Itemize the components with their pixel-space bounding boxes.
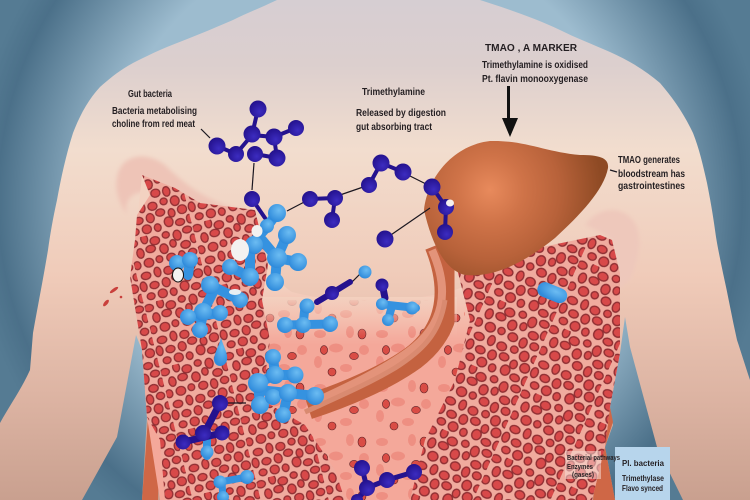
side strip: left flank (142, 418, 160, 500)
arrow to liver (502, 86, 518, 137)
hepatic duct (305, 245, 447, 412)
caption panel: bottom right: Pl. bacteria (622, 459, 665, 468)
label: trimethylamine: Trimethylamine (362, 87, 425, 98)
label: TMAO: TMAO , A MARKER (485, 43, 578, 54)
tissue: fade above sparse cells (262, 297, 457, 337)
label: liver: gastrointestines (618, 181, 685, 192)
molecule: dark blue chain to liver (244, 154, 454, 248)
caption: lower tissue: Enzymes (567, 462, 593, 471)
caption panel: bottom right: Trimethylase (622, 474, 664, 483)
label: liver: TMAO generates (618, 155, 680, 166)
caption panel: bottom right: Flavo synced (622, 484, 663, 493)
molecule: lower light blue cluster (248, 349, 324, 423)
caption panel: bottom right (615, 447, 670, 500)
label: gut bacteria: Bacteria metabolising (112, 106, 197, 117)
label: TMAO (482, 43, 588, 85)
label: gut bacteria (112, 89, 197, 130)
tissue: left dense red cells (130, 175, 344, 500)
molecule: blue and dark centre (277, 266, 372, 333)
right fold halo (585, 210, 639, 290)
label: trimethylamine: gut absorbing tract (356, 122, 433, 133)
caption: lower tissue (565, 451, 620, 479)
caption: lower tissue: Bacterial pathways (567, 453, 620, 462)
liver (424, 141, 608, 275)
molecule: blue right of centre (376, 278, 418, 326)
molecule: dark bottom (351, 460, 422, 500)
capsule: blue on right tissue (535, 280, 569, 305)
tissue: right dense red cells (410, 235, 620, 500)
side strip: right flank (593, 407, 615, 500)
label: liver (618, 155, 685, 192)
molecule: dark and blue lower left (176, 395, 230, 458)
label: gut bacteria: Gut bacteria (128, 89, 172, 100)
tissue: central sparse cells (255, 300, 465, 500)
molecule: light blue central cluster (222, 204, 307, 291)
label: gut bacteria: choline from red meat (112, 119, 196, 130)
molecule: dark blue upper left (208, 100, 304, 166)
molecule: blue bottom (214, 470, 254, 500)
label: trimethylamine (356, 87, 446, 133)
molecule: light blue left blobs (169, 252, 248, 338)
label: TMAO: Pt. flavin monooxygenase (482, 74, 588, 85)
label: trimethylamine: Released by digestion (356, 108, 446, 119)
scattered cell fragments (102, 286, 122, 307)
label: liver: bloodstream has (618, 169, 685, 180)
label: TMAO: Trimethylamine is oxidised (482, 60, 588, 71)
drop: light blue (214, 338, 227, 366)
rib fold halo (116, 156, 258, 228)
abdomen tissue base (130, 175, 620, 500)
caption: lower tissue: (gases) (572, 470, 594, 479)
leader lines (201, 129, 617, 403)
